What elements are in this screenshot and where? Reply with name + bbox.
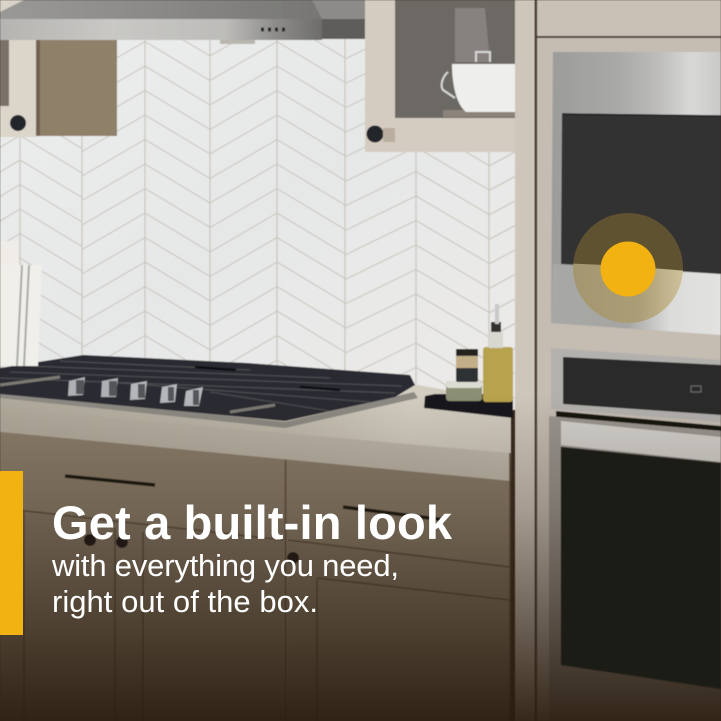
cabinet column: [515, 0, 536, 721]
yellow accent bar: [0, 471, 23, 635]
hotspot marker: [573, 213, 683, 323]
left upper cabinet: [0, 40, 117, 137]
lower oven door glass: [561, 447, 721, 689]
microwave oven: [551, 52, 721, 335]
cabinet handle: left drawer: [65, 476, 155, 485]
subheading line 2: right out of the box.: [52, 584, 318, 619]
lower wall oven control panel: [551, 348, 721, 431]
burner knob 4: [160, 384, 177, 403]
cutting boards: [0, 241, 42, 366]
headline text: [51, 496, 453, 619]
burner knob 3: [130, 381, 147, 400]
oven surround: [537, 0, 721, 721]
heading: Get a built-in look: [52, 496, 453, 549]
dark gradient overlay: [0, 395, 721, 721]
cabinet knobs: [84, 534, 299, 564]
burner knob 1: [68, 377, 85, 396]
right upper cabinet with pot: [365, 0, 516, 152]
cabinet handle: right drawer: [343, 507, 445, 520]
cooktop with burner knobs: [0, 355, 418, 428]
marker halo: [573, 213, 683, 323]
burner knob 2: [101, 378, 118, 397]
lower wall oven door: [549, 416, 721, 721]
burner knob 5: [184, 387, 203, 406]
countertop: [0, 385, 511, 481]
subheading line 1: with everything you need,: [51, 548, 399, 583]
range hood: [0, 0, 366, 44]
base cabinets: [0, 432, 510, 721]
tray with jars and oil bottle: [424, 304, 513, 418]
marker dot: [600, 242, 656, 296]
backsplash: white chevron tile: [0, 30, 516, 410]
